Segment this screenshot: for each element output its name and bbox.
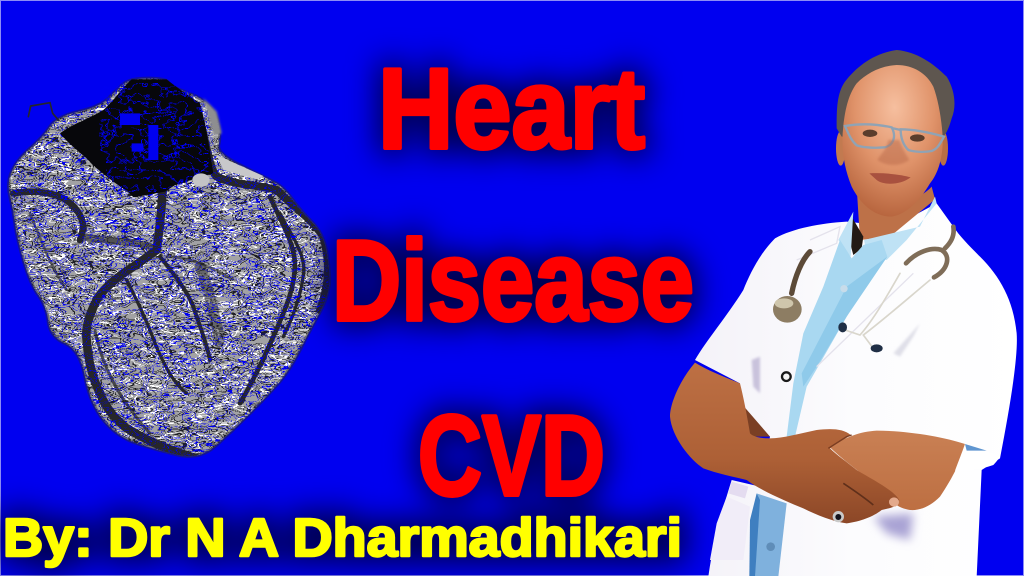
shirt xyxy=(749,197,937,576)
title: Heart: Heart xyxy=(378,46,645,173)
ears xyxy=(836,131,845,166)
neck xyxy=(857,187,935,240)
glasses xyxy=(845,124,944,152)
coronary vessels xyxy=(13,120,328,458)
nose shade xyxy=(877,140,909,165)
dark undershirt gap xyxy=(848,217,863,255)
stray vessel at top left xyxy=(28,103,58,120)
title: CVD: CVD xyxy=(418,393,605,520)
hair xyxy=(837,50,954,137)
title glow: By: Dr N A Dharmadhikari xyxy=(3,508,682,568)
title glow: Disease xyxy=(332,218,694,345)
upper arm and hand xyxy=(670,363,899,523)
title glow: Heart xyxy=(378,46,645,173)
coat lapel edges xyxy=(797,227,913,367)
face xyxy=(842,65,943,217)
coat button xyxy=(782,372,791,381)
mouth xyxy=(869,173,911,184)
arms xyxy=(670,363,965,523)
title glow: CVD xyxy=(418,393,605,520)
eyes xyxy=(863,130,877,137)
head xyxy=(836,50,954,217)
stethoscope xyxy=(773,227,954,352)
far arm behind coat xyxy=(735,397,770,437)
ring xyxy=(833,511,844,522)
forearm xyxy=(830,431,965,510)
sleeve cuff xyxy=(955,444,1000,471)
dark aorta region xyxy=(60,79,263,197)
heart outer edge shadow xyxy=(9,78,329,456)
title: Disease: Disease xyxy=(332,218,694,345)
white coat xyxy=(695,203,1017,576)
heart body xyxy=(8,78,330,456)
title glow xyxy=(3,46,694,568)
coat shading xyxy=(710,323,920,560)
doctor portrait xyxy=(670,50,1017,576)
author credit: By: Dr N A Dharmadhikari xyxy=(3,508,682,568)
heart illustration xyxy=(0,70,340,470)
